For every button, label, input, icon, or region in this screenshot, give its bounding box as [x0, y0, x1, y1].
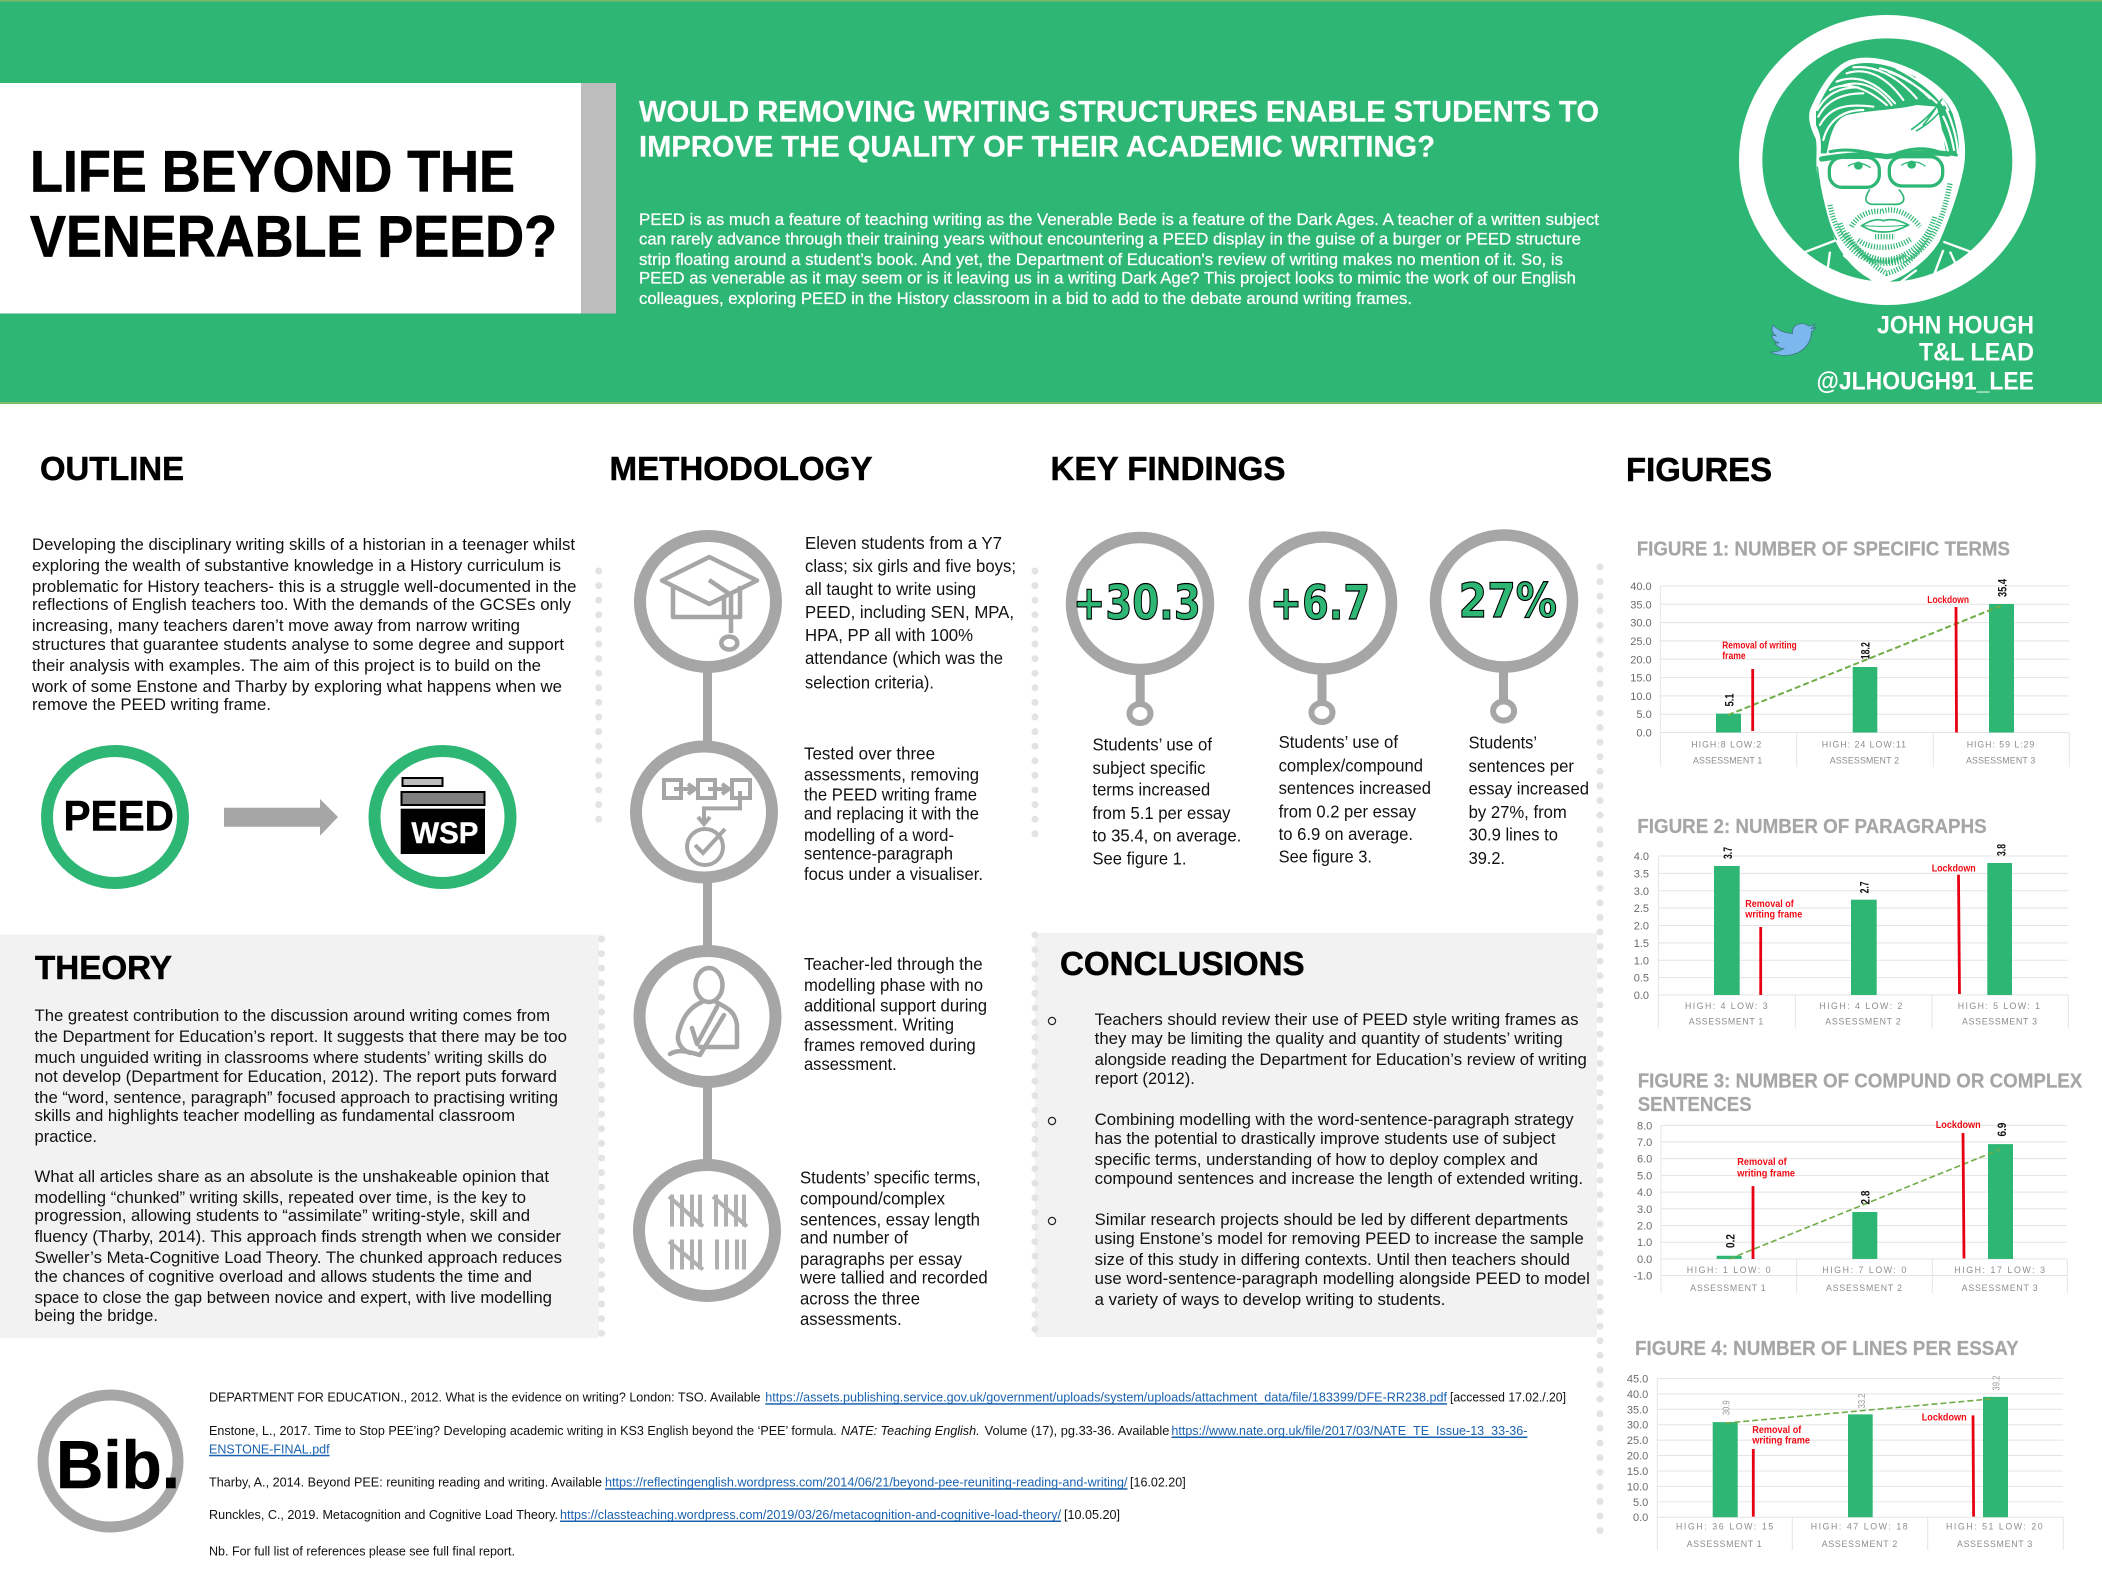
icon: process flow: [636, 746, 772, 878]
methodology step 2 text: Tested over three: [804, 743, 935, 763]
heading: conclusions: CONCLUSIONS: [1060, 945, 1305, 982]
finding 1 caption: from 5.1 per essay: [1092, 803, 1231, 823]
finding 3 caption: essay increased: [1469, 779, 1589, 799]
figure 1 bar chart: 30.0: [1630, 618, 1652, 630]
figure 4: [1627, 1338, 2063, 1550]
reference 3: https://reflectingenglish.wordpress.com/2014/06/21/beyond-pee-reuniting-reading-and-writing/: [605, 1476, 1128, 1490]
figure 4 bar chart: 25.0: [1627, 1435, 1648, 1447]
conclusion 2: [1095, 1111, 1583, 1188]
finding 2 caption: complex/compound: [1279, 755, 1423, 775]
figure 2 bar chart: ASSESSMENT 1: [1689, 1017, 1763, 1027]
theory text: The greatest contribution to the discussion around writing comes from: [34, 1007, 550, 1025]
figure 2 bar chart: 3.0: [1634, 886, 1649, 898]
outline text: their analysis with examples. The aim of this project is to build on the: [32, 657, 541, 675]
figure 3 bar chart: 0.0: [1637, 1254, 1652, 1266]
author details: @JLHOUGH91_LEE: [1816, 367, 2034, 395]
theory text: fluency (Tharby, 2014). This approach finds strength when we consider: [34, 1228, 562, 1246]
methodology step 4 text: Students’ specific terms,: [800, 1167, 981, 1187]
reference 2: https://www.nate.org.uk/file/2017/03/NATE_TE_Issue-13_33-36-: [1171, 1424, 1527, 1438]
author details: JOHN HOUGH: [1877, 311, 2034, 339]
figure 4 bar chart: ASSESSMENT 3: [1957, 1539, 2032, 1549]
figure 2 bar chart: writing frame: [1744, 909, 1802, 921]
conclusion 1: alongside reading the Department for Education’s review of writing: [1095, 1051, 1587, 1069]
figure 3 bar chart: 8.0: [1637, 1120, 1652, 1132]
introduction text: can rarely advance through their training years without encountering a PEED display in the guise of a burger or PEED structure: [639, 229, 1581, 248]
methodology step 4 text: [799, 1167, 988, 1329]
finding 2: +6.7: +6.7: [1270, 576, 1370, 631]
author details: T&L LEAD: [1919, 339, 2034, 367]
theory text: the “word, sentence, paragraph” focused approach to practising writing: [34, 1089, 558, 1107]
finding 2 caption: See figure 3.: [1279, 847, 1372, 867]
figure 3 bar chart: 3.0: [1637, 1204, 1652, 1216]
dotted column dividers: [599, 567, 1600, 1531]
methodology step 3 text: assessment.: [804, 1054, 897, 1074]
theory text: being the bridge.: [34, 1307, 158, 1325]
figure 1 bar chart: 5.1: [1722, 693, 1736, 706]
figure 3 title: [1638, 1071, 2083, 1116]
introduction text: PEED as venerable as it may seem or is it leaving us in a writing Dark Age? This project looks to mimic the work of our English: [639, 268, 1576, 287]
figure 4 bar chart: writing frame: [1751, 1436, 1810, 1447]
heading: theory: THEORY: [35, 949, 172, 986]
figure 1 bar chart: 10.0: [1630, 691, 1652, 703]
conclusion 3: [1095, 1211, 1590, 1309]
conclusion 1: Teachers should review their use of PEED style writing frames as: [1095, 1011, 1578, 1029]
panel: conclusions: [1035, 933, 1597, 1337]
finding 2 caption: from 0.2 per essay: [1279, 801, 1416, 821]
header banner: [0, 0, 2102, 404]
figure 4 bar chart: 15.0: [1627, 1466, 1648, 1478]
bibliography: [209, 1391, 1566, 1559]
outline text: remove the PEED writing frame.: [32, 696, 271, 714]
methodology step 2 text: the PEED writing frame: [804, 785, 977, 805]
conclusion 1: report (2012).: [1095, 1070, 1195, 1088]
theory text: not develop (Department for Education, 2012). The report puts forward: [34, 1068, 557, 1086]
finding 3 caption: by 27%, from: [1469, 802, 1567, 822]
methodology step 4 text: across the three: [800, 1288, 920, 1308]
conclusion 3: size of this study in differing contexts. Until then teachers should: [1095, 1251, 1570, 1269]
figure 1 bar chart: [1630, 579, 2069, 767]
theory text: progression, allowing students to “assimilate” writing-style, skill and: [34, 1207, 530, 1225]
methodology step 2 text: sentence-paragraph: [804, 843, 953, 863]
figure 3 bar chart: 6.0: [1637, 1154, 1652, 1166]
reference 4: https://classteaching.wordpress.com/2019/03/26/metacognition-and-cognitive-load-theory/: [560, 1508, 1062, 1522]
finding 3 caption: 39.2.: [1469, 848, 1505, 868]
methodology step 4 text: and number of: [800, 1228, 908, 1248]
theory text: the chances of cognitive overload and allows students the time and: [34, 1268, 532, 1286]
figure 4 title: FIGURE 4: NUMBER OF LINES PER ESSAY: [1635, 1338, 2019, 1360]
methodology step 4 text: sentences, essay length: [800, 1210, 980, 1230]
figure 1: [1630, 538, 2069, 767]
methodology step 3 text: modelling phase with no: [804, 975, 983, 995]
finding 1 caption: terms increased: [1092, 780, 1210, 800]
figure 2 bar chart: 3.7: [1721, 847, 1735, 859]
introduction text: [639, 210, 1599, 308]
conclusion 3: Similar research projects should be led by different departments: [1095, 1211, 1568, 1229]
icon: PEED circle: [47, 751, 183, 883]
theory text: much unguided writing in classrooms where students’ writing skills do: [34, 1049, 547, 1067]
finding 1: +30.3: [1072, 538, 1241, 868]
methodology step 2 text: assessments, removing: [804, 764, 979, 784]
figure 1 bar chart: 18.2: [1859, 642, 1873, 659]
figure 4 bar chart: 5.0: [1633, 1497, 1648, 1509]
figure 2 bar chart: 3.5: [1634, 868, 1649, 880]
figure 3 bar chart: HIGH: 7 LOW: 0: [1822, 1265, 1906, 1275]
figure 3 bar chart: 1.0: [1637, 1237, 1652, 1249]
finding 1: +30.3: +30.3: [1073, 576, 1201, 631]
figure 3 bar chart: ASSESSMENT 3: [1962, 1283, 2038, 1293]
figure 4 bar chart: 10.0: [1627, 1481, 1648, 1493]
figure 2 bar chart: 2.0: [1634, 920, 1649, 932]
research question: [639, 96, 1599, 164]
finding 3 caption: sentences per: [1469, 756, 1574, 776]
figure 1 bar chart: ASSESSMENT 1: [1693, 756, 1762, 766]
icon: teacher with check: [640, 951, 776, 1082]
figure 2 bar chart: 0.5: [1634, 973, 1649, 985]
heading: outline: OUTLINE: [40, 450, 184, 487]
outline text: reflections of English teachers too. With the demands of the GCSEs only: [32, 596, 572, 614]
conclusion 2: Combining modelling with the word-sentence-paragraph strategy: [1095, 1111, 1574, 1129]
outline text: structures that guarantee students analyse to some degree and support: [32, 636, 564, 654]
figure 3 title: FIGURE 3: NUMBER OF COMPUND OR COMPLEX: [1638, 1071, 2083, 1093]
figure 1 bar chart: Removal of writing: [1722, 640, 1797, 652]
finding 2: +6.7: [1254, 537, 1431, 867]
figure 4 bar chart: 35.0: [1627, 1404, 1648, 1416]
finding 1 caption: See figure 1.: [1092, 848, 1186, 868]
figure 4 bar chart: ASSESSMENT 1: [1687, 1539, 1762, 1549]
methodology step 2 text: and replacing it with the: [804, 804, 979, 824]
figure 1 bar chart: 0.0: [1636, 728, 1652, 740]
reference 3: [16.02.20]: [1130, 1476, 1186, 1490]
figure 4 bar chart: HIGH: 36 LOW: 15: [1676, 1522, 1773, 1532]
conclusion 1: they may be limiting the quality and quantity of students’ writing: [1095, 1030, 1563, 1048]
figure 2 bar chart: ASSESSMENT 3: [1962, 1017, 2037, 1027]
icon: Bib circle: Bib.: [56, 1427, 180, 1503]
methodology step 1 text: [805, 533, 1016, 692]
figure 2 bar chart: 1.5: [1634, 938, 1649, 950]
figure 3 bar chart: -1.0: [1633, 1271, 1652, 1283]
theory text: the Department for Education’s report. It suggests that there may be too: [34, 1028, 567, 1046]
figure 1 bar chart: frame: [1722, 650, 1746, 662]
figure 2 bar chart: 0.0: [1634, 990, 1649, 1002]
figure 3 bar chart: HIGH: 1 LOW: 0: [1687, 1265, 1771, 1275]
theory text: practice.: [34, 1128, 97, 1146]
heading: methodology: METHODOLOGY: [610, 450, 872, 487]
methodology step 3 text: frames removed during: [804, 1035, 976, 1055]
figure 1 bar chart: ASSESSMENT 3: [1966, 756, 2035, 766]
figure 4 bar chart: 33.2: [1857, 1393, 1868, 1408]
reference 4: [10.05.20]: [1064, 1508, 1120, 1522]
finding 2 caption: Students’ use of: [1279, 732, 1398, 752]
finding 1 caption: subject specific: [1092, 758, 1206, 778]
methodology step 1 text: PEED, including SEN, MPA,: [805, 602, 1014, 622]
figure 2 bar chart: HIGH: 5 LOW: 1: [1958, 1001, 2040, 1011]
figure 3 bar chart: 5.0: [1637, 1170, 1652, 1182]
figure 4 bar chart: ASSESSMENT 2: [1822, 1539, 1897, 1549]
figure 3 bar chart: writing frame: [1736, 1168, 1795, 1179]
figure 2 title: FIGURE 2: NUMBER OF PARAGRAPHS: [1637, 816, 1987, 838]
figure 4 bar chart: 39.2: [1992, 1376, 2003, 1391]
reference 3: Tharby, A., 2014. Beyond PEE: reuniting reading and writing. Available: [209, 1476, 602, 1490]
methodology step 4 text: were tallied and recorded: [799, 1267, 988, 1287]
icon: twitter bird: [1770, 324, 1816, 355]
conclusion 1: [1095, 1011, 1587, 1088]
methodology step 1 text: class; six girls and five boys;: [805, 556, 1016, 576]
reference 1: [accessed 17.02./.20]: [1450, 1391, 1566, 1405]
figure 3 bar chart: 2.0: [1637, 1221, 1652, 1232]
finding 2 caption: sentences increased: [1279, 778, 1431, 798]
figure 4 bar chart: 0.0: [1633, 1512, 1648, 1524]
figure 3 bar chart: 7.0: [1637, 1137, 1652, 1149]
theory text: [34, 1007, 567, 1325]
methodology step 1 text: HPA, PP all with 100%: [805, 625, 973, 645]
figure 3 bar chart: Removal of: [1737, 1157, 1787, 1168]
figure 4 bar chart: [1627, 1373, 2063, 1550]
theory text: space to close the gap between novice and expert, with live modelling: [34, 1289, 552, 1307]
methodology step 3 text: Teacher-led through the: [804, 954, 983, 974]
methodology step 4 text: paragraphs per essay: [800, 1249, 962, 1269]
finding 1 caption: [1092, 735, 1241, 868]
figure 1 bar chart: 35.4: [1995, 579, 2009, 597]
outline text: [31, 536, 576, 714]
conclusion 3: a variety of ways to develop writing to students.: [1095, 1291, 1445, 1309]
panel: theory: [0, 935, 602, 1338]
reference 1: https://assets.publishing.service.gov.uk/government/uploads/system/uploads/attachment_data/file/183399/DFE-RR238.pdf: [765, 1391, 1448, 1405]
research question: WOULD REMOVING WRITING STRUCTURES ENABLE STUDENTS TO: [639, 96, 1599, 129]
icon: Bib circle: [43, 1395, 180, 1527]
icon: PEED circle: PEED: [64, 793, 174, 841]
finding 1 caption: to 35.4, on average.: [1092, 826, 1241, 846]
figure 4 bar chart: 45.0: [1627, 1373, 1648, 1385]
methodology step 3 text: assessment. Writing: [804, 1014, 954, 1034]
methodology step 1 text: selection criteria).: [805, 672, 934, 692]
heading: key findings: KEY FINDINGS: [1050, 450, 1286, 487]
finding 3 caption: Students’: [1469, 733, 1537, 753]
figure 2 bar chart: 3.8: [1994, 844, 2008, 856]
figure 4 bar chart: 30.0: [1627, 1420, 1648, 1432]
title panel: VENERABLE PEED?: [30, 205, 557, 270]
figure 4 bar chart: HIGH: 51 LOW: 20: [1946, 1522, 2043, 1532]
methodology step 2 text: focus under a visualiser.: [804, 864, 983, 884]
reference 4: Runckles, C., 2019. Metacognition and Cognitive Load Theory.: [209, 1508, 558, 1522]
methodology timeline connectors: [703, 668, 712, 1163]
heading: figures: FIGURES: [1626, 451, 1772, 488]
outline text: increasing, many teachers daren’t move away from narrow writing: [32, 617, 520, 635]
figure 3 bar chart: HIGH: 17 LOW: 3: [1954, 1265, 2045, 1275]
figure 3 bar chart: 6.9: [1995, 1122, 2009, 1137]
finding 1 caption: Students’ use of: [1092, 735, 1212, 755]
title panel: LIFE BEYOND THE: [30, 140, 515, 205]
figure 2 bar chart: Removal of: [1745, 898, 1794, 910]
conclusion 2: specific terms, understanding of how to deploy complex and: [1095, 1151, 1538, 1169]
reference 1: DEPARTMENT FOR EDUCATION., 2012. What is the evidence on writing? London: TSO. Available: [209, 1391, 764, 1405]
figure 3 title: SENTENCES: [1638, 1094, 1752, 1116]
figure 3 bar chart: ASSESSMENT 1: [1690, 1283, 1766, 1293]
figure 3 bar chart: 4.0: [1637, 1187, 1652, 1199]
figure 1 bar chart: HIGH: 24 LOW:11: [1822, 739, 1906, 749]
figure 3 bar chart: 2.8: [1858, 1190, 1873, 1205]
reference 2: NATE: Teaching English.: [841, 1424, 980, 1438]
methodology step 2 text: [804, 743, 983, 884]
introduction text: PEED is as much a feature of teaching writing as the Venerable Bede is a feature of the Dark Ages. A teacher of a written subject: [639, 210, 1599, 229]
finding 3: 27%: [1436, 535, 1589, 868]
figure 4 bar chart: 20.0: [1627, 1451, 1648, 1463]
figure 2 bar chart: 2.7: [1857, 881, 1871, 893]
icon: tally marks: [639, 1165, 775, 1296]
portrait of author: [1751, 27, 2024, 293]
reference 1: [209, 1391, 1566, 1405]
figure 1 bar chart: HIGH: 59 L:29: [1967, 739, 2034, 749]
figure 1 bar chart: HIGH:8 LOW:2: [1691, 739, 1761, 749]
reference 2: Enstone, L., 2017. Time to Stop PEE’ing? Developing academic writing in KS3 English beyond the ‘PEE’ formula.: [209, 1424, 837, 1438]
figure 4 bar chart: HIGH: 47 LOW: 18: [1811, 1522, 1908, 1532]
introduction text: strip floating around a student’s book. And yet, the Department of Education's review of writing makes no mention of it. So, is: [639, 250, 1563, 269]
figure 4 bar chart: Removal of: [1752, 1425, 1802, 1436]
figure 4 bar chart: 40.0: [1627, 1389, 1648, 1401]
figure 1 bar chart: ASSESSMENT 2: [1830, 756, 1899, 766]
introduction text: colleagues, exploring PEED in the History classroom in a bid to add to the debate around writing frames.: [639, 289, 1412, 308]
figure 2: [1634, 816, 2068, 1028]
outline text: Developing the disciplinary writing skills of a historian in a teenager whilst: [32, 536, 575, 554]
theory text: skills and highlights teacher modelling as fundamental classroom: [34, 1107, 515, 1125]
conclusion 2: has the potential to drastically improve students use of subject: [1095, 1130, 1556, 1148]
outline text: exploring the wealth of substantive knowledge in a History curriculum is: [32, 557, 561, 575]
icon: graduation cap: [640, 536, 776, 667]
reference 2: Volume (17), pg.33-36. Available: [985, 1424, 1169, 1438]
conclusion 3: using Enstone’s model for removing PEED to increase the sample: [1095, 1230, 1584, 1248]
conclusion 3: use word-sentence-paragraph modelling alongside PEED to model: [1095, 1270, 1590, 1288]
methodology step 3 text: [804, 954, 987, 1074]
methodology step 3 text: additional support during: [804, 995, 987, 1015]
conclusion bullets: [1048, 1017, 1056, 1225]
outline text: work of some Enstone and Tharby by exploring what happens when we: [31, 678, 562, 696]
reference 3: [209, 1476, 1186, 1490]
theory text: modelling “chunked” writing skills, repeated over time, is the key to: [34, 1189, 526, 1207]
figure 2 bar chart: HIGH: 4 LOW: 3: [1685, 1001, 1768, 1011]
methodology step 4 text: compound/complex: [800, 1188, 945, 1208]
figure 3: [1633, 1071, 2083, 1293]
bibliography note: Nb. For full list of references please see full final report.: [209, 1545, 515, 1559]
figure 4 bar chart: 30.9: [1721, 1400, 1733, 1415]
figure 1 bar chart: 5.0: [1636, 709, 1652, 721]
theory text: What all articles share as an absolute is the unshakeable opinion that: [34, 1168, 549, 1186]
methodology step 1 text: attendance (which was the: [805, 648, 1003, 668]
figure 2 bar chart: [1634, 844, 2068, 1028]
finding 2 caption: to 6.9 on average.: [1279, 824, 1413, 844]
conclusion 2: compound sentences and increase the length of extended writing.: [1095, 1170, 1583, 1188]
methodology step 1 text: Eleven students from a Y7: [805, 533, 1002, 553]
arrow: PEED to WSP: [224, 799, 338, 836]
research question: IMPROVE THE QUALITY OF THEIR ACADEMIC WRITING?: [639, 131, 1435, 164]
methodology step 1 text: all taught to write using: [805, 579, 976, 599]
figure 3 bar chart: ASSESSMENT 2: [1826, 1283, 1902, 1293]
theory text: Sweller’s Meta-Cognitive Load Theory. The chunked approach reduces: [34, 1249, 562, 1267]
figure 2 bar chart: 2.5: [1634, 903, 1649, 915]
figure 2 bar chart: ASSESSMENT 2: [1825, 1017, 1901, 1027]
reference 4: [209, 1508, 1120, 1522]
methodology step 2 text: modelling of a word-: [804, 825, 954, 845]
icon: WSP circle: [374, 751, 510, 883]
figure 2 bar chart: 1.0: [1634, 955, 1649, 967]
finding 3 caption: [1469, 733, 1589, 868]
title panel: [0, 83, 616, 314]
figure 1 title: FIGURE 1: NUMBER OF SPECIFIC TERMS: [1637, 538, 2010, 560]
figure 2 bar chart: 4.0: [1634, 851, 1649, 863]
figure 3 bar chart: [1633, 1120, 2067, 1293]
figure 3 bar chart: Lockdown: [1936, 1120, 1981, 1131]
figure 1 bar chart: 35.0: [1630, 599, 1652, 611]
figure 2 bar chart: Lockdown: [1932, 862, 1976, 874]
reference 2: [209, 1424, 1527, 1456]
author details: [1816, 311, 2034, 395]
outline text: problematic for History teachers- this is a struggle well-documented in the: [32, 578, 576, 596]
figure 4 bar chart: Lockdown: [1922, 1413, 1967, 1424]
figure 1 bar chart: 20.0: [1630, 654, 1652, 666]
figure 3 bar chart: 0.2: [1723, 1234, 1738, 1248]
figure 1 bar chart: 40.0: [1630, 581, 1652, 593]
figure 2 bar chart: HIGH: 4 LOW: 2: [1819, 1001, 1902, 1011]
figure 1 bar chart: Lockdown: [1927, 594, 1969, 606]
reference 2: ENSTONE-FINAL.pdf: [209, 1442, 330, 1456]
icon: WSP circle: WSP: [411, 817, 478, 850]
figure 1 bar chart: 15.0: [1630, 673, 1652, 685]
methodology step 4 text: assessments.: [800, 1309, 902, 1329]
figure 1 bar chart: 25.0: [1630, 636, 1652, 648]
finding 2 caption: [1279, 732, 1431, 867]
finding 3: 27%: 27%: [1459, 574, 1557, 629]
finding 3 caption: 30.9 lines to: [1469, 825, 1558, 845]
